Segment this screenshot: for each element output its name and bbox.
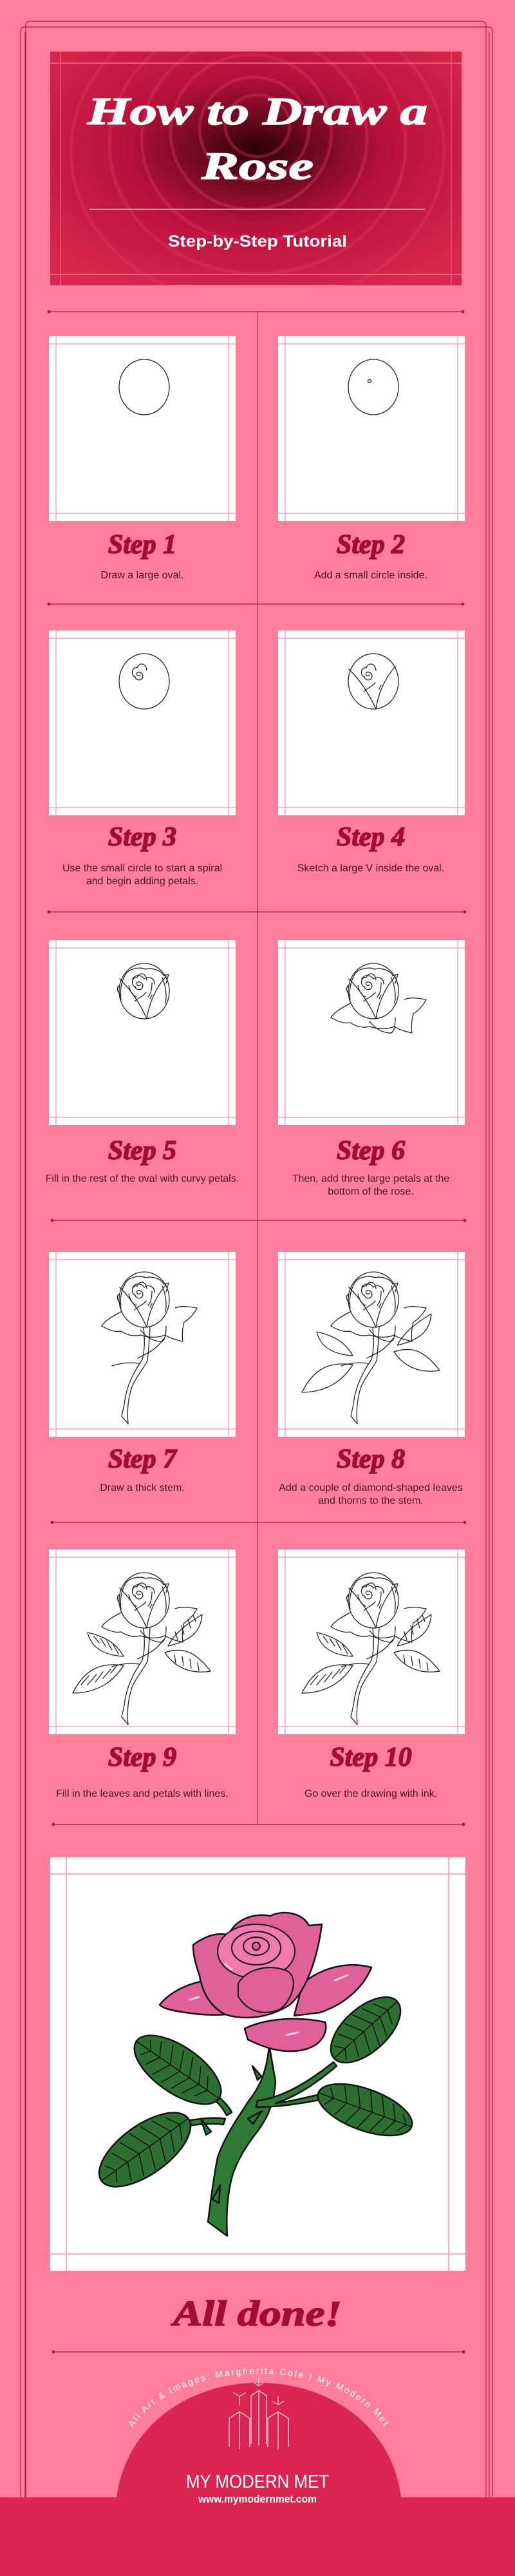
panel: step 10: Step 10 — [330, 1743, 412, 1772]
panel: step 6 — [278, 940, 465, 1197]
panel: step 9: Fill in the leaves and petals with lines. — [56, 1788, 229, 1799]
panel: step 6: Step 6 — [337, 1136, 405, 1166]
title: Rose — [201, 145, 314, 187]
panel: step 7: Step 7 — [108, 1444, 178, 1474]
panel: step 8: Step 8 — [337, 1444, 405, 1474]
panel: step 3: and begin adding petals. — [86, 876, 198, 887]
panel: step 2: Step 2 — [337, 530, 405, 560]
panel: step 9: Step 9 — [108, 1743, 176, 1772]
heading: all done: All done! — [171, 2294, 342, 2334]
panel: step 7: Draw a thick stem. — [100, 1482, 185, 1493]
leaves — [87, 1985, 418, 2201]
panel: step 8: Add a couple of diamond-shaped leaves — [279, 1482, 463, 1493]
panel: step 5: Step 5 — [108, 1136, 176, 1166]
panel: step 3: Use the small circle to start a spiral — [62, 863, 222, 874]
logo text — [186, 2472, 329, 2505]
panel: step 7 — [49, 1252, 236, 1493]
panel: step 4 — [278, 630, 465, 874]
grid rules — [48, 310, 466, 2353]
panel: step 6: bottom of the rose. — [328, 1186, 414, 1197]
panel: step 5: Fill in the rest of the oval with curvy petals. — [46, 1173, 239, 1184]
title — [87, 90, 427, 187]
stem and branches — [187, 2045, 337, 2236]
hero: rose photo banner with title — [50, 52, 462, 285]
panel: step 8 — [278, 1252, 465, 1506]
panel: step 2: Add a small circle inside. — [314, 570, 427, 581]
footer credit arc text: All Art & Images: Margherita Cole | My Modern Met — [129, 2367, 389, 2428]
logo text: www.mymodernmet.com — [198, 2493, 317, 2505]
title: How to Draw a — [87, 90, 427, 133]
panel: step 3: Step 3 — [108, 822, 176, 852]
subtitle: Step-by-Step Tutorial — [168, 232, 347, 251]
panel: step 3 — [49, 630, 236, 887]
panel: step 6: Then, add three large petals at the — [292, 1173, 449, 1184]
panel: step 10 — [278, 1549, 465, 1799]
panel: step 1: Step 1 — [108, 530, 176, 560]
icon: my modern met buildings logo — [229, 2376, 288, 2449]
panel: step 4: Sketch a large V inside the oval. — [297, 863, 444, 874]
panel: step 2 — [278, 336, 465, 581]
flower — [160, 1913, 371, 2051]
panel: step 1 — [49, 336, 236, 581]
panel: step 5 — [46, 940, 239, 1184]
logo text: MY MODERN MET — [186, 2472, 329, 2492]
final colored rose illustration — [50, 1857, 465, 2271]
panel: step 8: and thorns to the stem. — [318, 1495, 424, 1506]
footer band — [0, 2383, 515, 2576]
panel: step 9 — [49, 1549, 236, 1799]
panel: step 10: Go over the drawing with ink. — [304, 1788, 437, 1799]
panel: step 1: Draw a large oval. — [101, 570, 183, 581]
panel: step 4: Step 4 — [337, 822, 405, 852]
